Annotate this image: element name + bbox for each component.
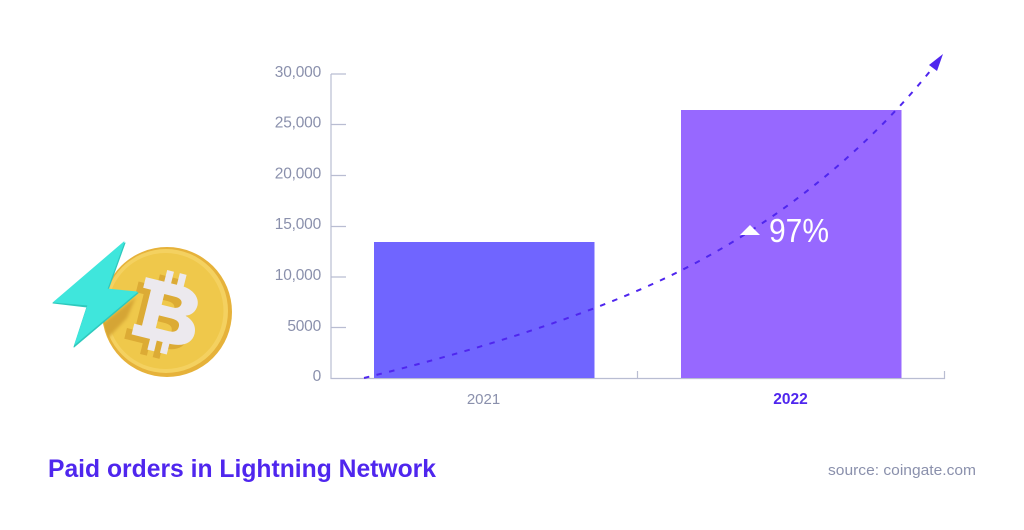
icon: bitcoin symbol [122,264,208,366]
dashed growth arrow [364,54,943,378]
icon: bitcoin coin with lightning bolt [53,242,232,377]
icon: up triangle [740,225,760,235]
y-axis labels [275,64,322,385]
y-axis labels: 25,000 [275,114,322,132]
y-axis labels: 0 [313,368,322,385]
callout: 97% increase [740,212,829,249]
x-axis label: 2021: 2021 [467,391,500,408]
y-axis labels: 20,000 [275,166,322,182]
bar: 2022 [681,110,902,378]
icon: lightning bolt [53,242,138,347]
icon: bolt shadow on coin [104,298,136,338]
source note: source: coingate.com [828,462,976,479]
y-axis labels: 15,000 [275,216,322,233]
chart axes and ticks [331,74,944,378]
infographic canvas [50,54,975,482]
title: Paid orders in Lightning Network [48,455,436,483]
x-axis label: 2022: 2022 [773,391,808,408]
y-axis labels: 5000 [287,318,322,335]
bar: 2021 [374,242,594,378]
y-axis labels: 30,000 [275,64,322,81]
callout value: 97% [769,212,829,249]
icon: gold coin [102,247,232,377]
y-axis labels: 10,000 [275,267,322,284]
